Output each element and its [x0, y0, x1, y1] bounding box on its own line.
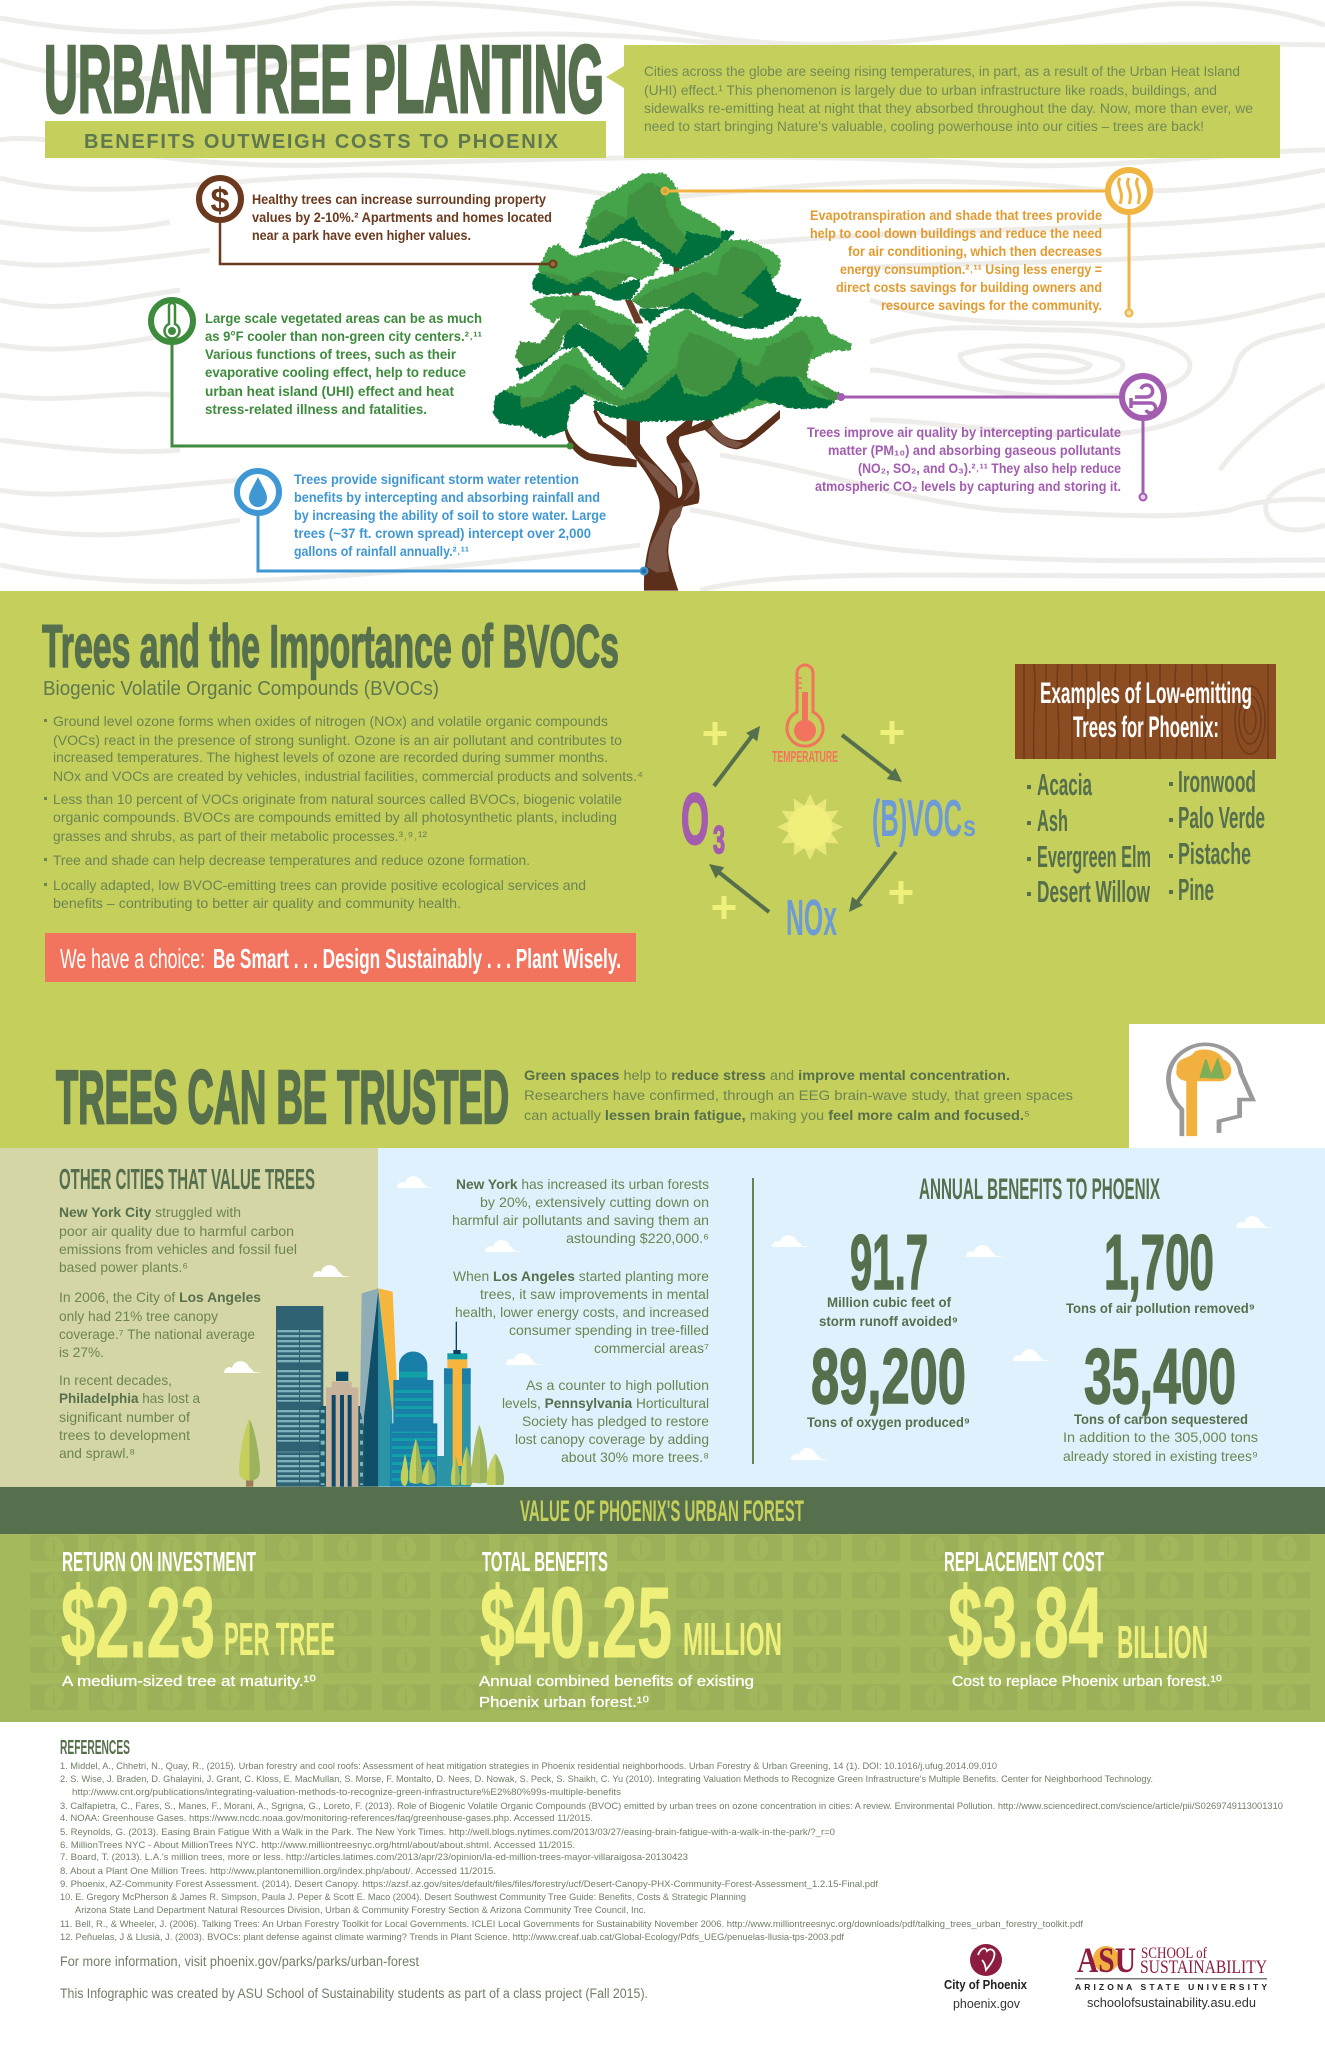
text block: BVOC bullets: Locally adapted, low BVOC-emitting trees can provide positive ecological services and: [53, 877, 586, 893]
stat: replacement cost: Cost to replace Phoenix urban forest.¹⁰: [952, 1673, 1222, 1690]
stat: storm runoff: Million cubic feet of: [827, 1294, 951, 1310]
text block: centre paragraphs: When Los Angeles started planting more: [453, 1268, 709, 1284]
text block: BVOC bullets: Ground level ozone forms when oxides of nitrogen (NOx) and volatile organic compounds: [53, 713, 608, 729]
text block: left paragraphs: trees to development: [59, 1427, 190, 1443]
text block: BVOC bullets: organic compounds. BVOCs are compounds emitted by all photosynthetic plants, including: [53, 809, 617, 825]
reference list: 2. S. Wise, J. Braden, D. Ghalayini, J. Grant, C. Kloss, E. MacMullan, S. Morse, F. Montalto, D. Nees, D. Nowak, S. Peck, S. Shaikh, C. Yu (2010). Integrating Valuation Methods to Recognize Green Infrastructure's Multiple Benefits. Center for Neighborhood Technology.: [60, 1774, 1153, 1785]
labels: (B)VOC: [872, 790, 962, 848]
text block: left paragraphs: In 2006, the City of Los Angeles: [59, 1289, 261, 1305]
subtitle banner: BENEFITS OUTWEIGH COSTS TO PHOENIX: [84, 131, 559, 153]
text block: BVOC bullets: grasses and shrubs, as part of their metabolic processes.³˒⁹˒¹²: [53, 828, 427, 844]
reference list: 8. About a Plant One Million Trees. http://www.plantonemillion.org/index.php/about/. Accessed 11/2015.: [60, 1866, 496, 1877]
reference list: 7. Board, T. (2013). L.A.'s million trees, more or less. http://articles.latimes.com/2013/apr/23/opinion/la-ed-million-trees-mayor-villaraigosa-20130423: [60, 1852, 688, 1863]
list: low-emitting trees: Ash: [1037, 803, 1068, 838]
text block: BVOC bullets: [44, 713, 643, 911]
reference list: http://www.cnt.org/publications/integrating-valuation-methods-to-recognize-green-infrastructure%E2%80%99s-multiple-benefits: [72, 1787, 621, 1798]
labels: O: [681, 780, 709, 860]
right tower: [437, 1322, 471, 1487]
intro panel: sidewalks re-emitting heat at night that they absorbed throughout the day. Now, more than ever, we: [644, 100, 1253, 116]
connector line: [665, 191, 1129, 313]
text: matter (PM₁₀) and absorbing gaseous pollutants: [828, 442, 1121, 458]
labels: [681, 780, 976, 946]
text: direct costs savings for building owners and: [836, 279, 1102, 295]
text: stress-related illness and fatalities.: [205, 401, 427, 417]
dome building: [390, 1352, 437, 1487]
reference list: Arizona State Land Department Natural Resources Division, Urban & Community Forestry Section & Arizona Community Tree Council, Inc.: [75, 1905, 646, 1916]
text: [810, 207, 1102, 313]
icon: thermometer: TEMPERATURE: [772, 749, 838, 766]
text block: BVOC bullets: (VOCs) react in the presence of strong sunlight. Ozone is an air pollutant and contributes to: [53, 732, 622, 748]
stat: return on investment: A medium-sized tree at maturity.¹⁰: [62, 1673, 316, 1690]
icon: heat waves: [1108, 170, 1150, 212]
callout: air quality: [807, 376, 1164, 500]
text: as 9°F cooler than non-green city centers.²˒¹¹: [205, 328, 482, 344]
logo: ASU School of Sustainability: SCHOOL of: [1141, 1945, 1208, 1962]
text: trees (~37 ft. crown spread) intercept over 2,000: [294, 525, 591, 541]
beige building: [326, 1372, 358, 1487]
text block: left paragraphs: coverage.⁷ The national average: [59, 1326, 255, 1342]
icon: wind: [1122, 376, 1164, 418]
stat: oxygen: [807, 1332, 970, 1430]
text: energy consumption.²˒¹¹ Using less energy =: [840, 261, 1102, 277]
references: [60, 1737, 1283, 2001]
logo: ASU School of Sustainability: SUSTAINABILITY: [1140, 1957, 1267, 1978]
callout: cooler areas: [151, 300, 574, 450]
heading: BVOCs: [42, 613, 619, 700]
text: urban heat island (UHI) effect and heat: [205, 383, 454, 399]
stat: air pollution: Tons of air pollution removed⁹: [1066, 1300, 1255, 1316]
icon: head with tree: [1129, 1024, 1325, 1149]
stat: return on investment: RETURN ON INVESTMENT: [62, 1546, 256, 1577]
intro panel: Cities across the globe are seeing rising temperatures, in part, as a result of the Urban Heat Island: [644, 63, 1240, 79]
list: low-emitting trees: Evergreen Elm: [1037, 839, 1151, 874]
clouds: [224, 1176, 1275, 1460]
reference list: 10. E. Gregory McPherson & James R. Simpson, Paula J. Peper & Scott E. Maco (2004). Desert Southwest Community Tree Guide: Benefits, Costs & Strategic Planning: [60, 1892, 746, 1903]
icon: dollar: [199, 178, 241, 220]
connector line: [841, 397, 1143, 497]
text: Various functions of trees, such as their: [205, 346, 457, 362]
stat: total benefits: $40.25: [480, 1567, 672, 1679]
text block: centre paragraphs: health, lower energy costs, and increased: [455, 1304, 709, 1320]
reference list: 5. Reynolds, G. (2013). Easing Brain Fatigue With a Walk in the Park. The New York Times. http://well.blogs.nytimes.com/2013/03/27/easing-brain-fatigue-with-a-walk-in-the-park/?_r=0: [60, 1827, 835, 1838]
icon: water drop: [237, 471, 279, 513]
labels: NOx: [786, 889, 837, 946]
text block: left paragraphs: Philadelphia has lost a: [59, 1390, 200, 1406]
connector line: [258, 516, 644, 571]
callout: storm water: [237, 471, 648, 574]
text: URBAN TREE PLANTING: [44, 26, 604, 133]
text block: centre paragraphs: As a counter to high pollution: [526, 1377, 709, 1393]
text block: centre paragraphs: commercial areas⁷: [594, 1340, 709, 1356]
side wings: [319, 1406, 364, 1487]
logo: ASU School of Sustainability: schoolofsustainability.asu.edu: [1087, 1995, 1256, 2010]
list: low-emitting trees: [1027, 764, 1265, 909]
text: Evapotranspiration and shade that trees provide: [810, 207, 1102, 223]
upper branch stubs: [572, 267, 680, 323]
text: Trees provide significant storm water retention: [294, 471, 579, 487]
text block: left paragraphs: significant number of: [59, 1409, 190, 1425]
text block: green spaces: Green spaces help to reduce stress and improve mental concentration.: [524, 1067, 1010, 1083]
callout: we have a choice: We have a choice:: [60, 943, 205, 974]
logo: ASU School of Sustainability: ASU: [1077, 1940, 1136, 1980]
icon: sun: [777, 794, 843, 860]
text: gallons of rainfall annually.²˒¹¹: [294, 543, 469, 559]
stat: return on investment: $2.23: [61, 1567, 215, 1679]
text block: left paragraphs: In recent decades,: [59, 1372, 172, 1388]
callout: property values: [199, 178, 556, 268]
text: resource savings for the community.: [881, 297, 1102, 313]
plus signs: [704, 721, 912, 919]
text block: left paragraphs: is 27%.: [59, 1344, 104, 1360]
list: low-emitting trees: Pine: [1178, 872, 1214, 907]
callout: cooling buildings: [662, 170, 1150, 316]
stat: carbon: 35,400: [1084, 1332, 1236, 1420]
text block: centre paragraphs: [452, 1176, 709, 1465]
text block: centre paragraphs: by 20%, extensively cutting down on: [480, 1194, 709, 1210]
logo: ASU School of Sustainability: ARIZONA STATE UNIVERSITY: [1075, 1982, 1267, 1992]
text block: left paragraphs: and sprawl.⁸: [59, 1445, 135, 1461]
panel: value band: VALUE OF PHOENIX'S URBAN FOREST: [520, 1495, 804, 1528]
text: (NO₂, SO₂, and O₃).²˒¹¹ They also help reduce: [858, 460, 1121, 476]
stat: carbon: [1063, 1332, 1258, 1464]
reference list: [60, 1761, 1283, 1943]
stat: storm runoff: storm runoff avoided⁹: [819, 1313, 958, 1329]
stat: total benefits: TOTAL BENEFITS: [482, 1546, 608, 1577]
tree illustration: [493, 173, 852, 591]
text: evaporative cooling effect, help to reduce: [205, 364, 466, 380]
connector line: [172, 345, 570, 446]
text block: left paragraphs: poor air quality due to harmful carbon: [59, 1223, 294, 1239]
text: TREES CAN BE TRUSTED: [56, 1055, 509, 1139]
text block: centre paragraphs: trees, it saw improvements in mental: [480, 1286, 709, 1302]
reference list: 9. Phoenix, AZ-Community Forest Assessment. (2014). Desert Canopy. https://azsf.az.gov/sites/default/files/files/forestry/ucf/Desert-Canopy-PHX-Community-Forest-Assessment_1.2.15-Final.pdf: [60, 1879, 878, 1890]
text block: centre paragraphs: astounding $220,000.⁶: [566, 1230, 709, 1246]
tree trunk and branches: [564, 408, 780, 591]
references heading: REFERENCES: [60, 1737, 130, 1759]
callout: we have a choice: Be Smart . . . Design Sustainably . . . Plant Wisely.: [213, 943, 621, 974]
stat: carbon: In addition to the 305,000 tons: [1063, 1429, 1258, 1445]
text block: BVOC bullets: benefits – contributing to better air quality and community health.: [53, 895, 461, 911]
stat: air pollution: 1,700: [1104, 1218, 1214, 1306]
stat: oxygen: Tons of oxygen produced⁹: [807, 1414, 970, 1430]
text block: centre paragraphs: Society has pledged to restore: [522, 1413, 709, 1429]
text: values by 2-10%.² Apartments and homes located: [252, 209, 552, 225]
text block: left paragraphs: New York City struggled with: [59, 1204, 241, 1220]
stat: storm runoff: [819, 1218, 958, 1329]
tower A: [276, 1306, 323, 1487]
labels: s: [963, 810, 976, 843]
heading: BVOCs: Biogenic Volatile Organic Compounds (BVOCs): [43, 678, 439, 700]
stat: replacement cost: REPLACEMENT COST: [944, 1546, 1104, 1577]
subtitle banner: [45, 121, 606, 158]
text: for air conditioning, which then decreases: [848, 243, 1102, 259]
stat: total benefits: Annual combined benefits of existing: [479, 1673, 754, 1690]
panel: value of urban forest: PER TREE: [224, 1613, 335, 1665]
stat: total benefits: Phoenix urban forest.¹⁰: [479, 1694, 649, 1711]
text: [807, 424, 1121, 494]
panel: BVOC section background: [0, 591, 1325, 1148]
text: Healthy trees can increase surrounding property: [252, 191, 546, 207]
panel: annual benefits: [807, 1173, 1258, 1464]
intro panel: need to start bringing Nature's valuable, cooling powerhouse into our cities – trees are back!: [644, 118, 1204, 134]
text block: centre paragraphs: about 30% more trees.⁸: [561, 1449, 709, 1465]
text block: left paragraphs: based power plants.⁶: [59, 1259, 188, 1275]
panel: value band: [0, 1487, 1325, 1534]
text block: BVOC bullets: Less than 10 percent of VOCs originate from natural sources called BVOCs, biogenic volatile: [53, 791, 622, 807]
credit: This Infographic was created by ASU School of Sustainability students as part of a class project (Fall 2015).: [60, 1986, 648, 2001]
arrows: [709, 726, 902, 912]
icon: dollar: $: [211, 182, 230, 220]
panel: value of urban forest: [0, 1534, 1325, 1722]
heading: BVOCs: Trees and the Importance of BVOCs: [42, 613, 619, 680]
text: atmospheric CO₂ levels by capturing and storing it.: [815, 478, 1121, 494]
text: by increasing the ability of soil to store water. Large: [294, 507, 606, 523]
list: low-emitting trees: Acacia: [1037, 767, 1092, 802]
stat: air pollution: [1066, 1218, 1255, 1316]
more information: For more information, visit phoenix.gov/parks/parks/urban-forest: [60, 1954, 419, 1969]
text block: green spaces: Researchers have confirmed, through an EEG brain-wave study, that green spaces: [524, 1087, 1073, 1103]
stat: storm runoff: 91.7: [850, 1218, 928, 1306]
stat: oxygen: 89,200: [811, 1332, 966, 1420]
text: [294, 471, 606, 559]
reference list: 11. Bell, R., & Wheeler, J. (2006). Talking Trees: An Urban Forestry Toolkit for Local Governments. ICLEI Local Governments for Sustainability November 2006. http://www.milliontreesnyc.org/downloads/pdf/talking_trees_urban_forestry_toolkit.pdf: [60, 1919, 1083, 1930]
wood grain background: [0, 3, 1325, 590]
stat: replacement cost: $3.84: [948, 1567, 1103, 1679]
labels: 3: [713, 819, 725, 862]
text: [205, 310, 482, 417]
reference list: 1. Middel, A., Chhetri, N., Quay, R., (2015). Urban forestry and cool roofs: Assessment of heat mitigation strategies in Phoenix residential neighborhoods. Urban Forestry & Urban Greening, 14 (1). DOI: 10.1016/j.ufug.2014.09.010: [60, 1761, 997, 1772]
list: low-emitting trees: Pistache: [1178, 836, 1251, 871]
logo: ASU School of Sustainability: [1075, 1940, 1267, 2010]
heading: other cities: OTHER CITIES THAT VALUE TREES: [59, 1164, 315, 1196]
intro panel: (UHI) effect.¹ This phenomenon is largely due to urban infrastructure like roads, buildings, and: [644, 82, 1217, 98]
text block: BVOC bullets: Tree and shade can help decrease temperatures and reduce ozone formation.: [53, 852, 530, 868]
text: near a park have even higher values.: [252, 227, 471, 243]
stat: total benefits: [479, 1546, 782, 1711]
stat: replacement cost: BILLION: [1117, 1616, 1208, 1668]
illustration: city skyline: [239, 1288, 504, 1487]
text: Large scale vegetated areas can be as much: [205, 310, 482, 326]
text block: green spaces: can actually lessen brain fatigue, making you feel more calm and focused. ⁵: [524, 1107, 1030, 1123]
tree canopy: [493, 173, 852, 438]
list: low-emitting trees: Desert Willow: [1037, 874, 1150, 909]
diagram: ozone cycle: [681, 665, 976, 946]
text block: BVOC bullets: NOx and VOCs are created by vehicles, industrial facilities, commercial products and solvents.⁴: [53, 768, 643, 784]
text: benefits by intercepting and absorbing rainfall and: [294, 489, 600, 505]
reference list: 4. NOAA: Greenhouse Gases. https://www.ncdc.noaa.gov/monitoring-references/faq/greenhouse-gases.php. Accessed 11/2015.: [60, 1813, 593, 1824]
text block: left paragraphs: [59, 1204, 297, 1461]
reference list: 6. MillionTrees NYC - About MillionTrees NYC. http://www.milliontreesnyc.org/html/about/about.shtml. Accessed 11/2015.: [60, 1840, 575, 1851]
callout: we have a choice: [45, 933, 636, 982]
reference list: 12. Peñuelas, J & Llusià, J. (2003). BVOCs: plant defense against climate warming? Trends in Plant Science. http://www.creaf.uab.cat/Global-Ecology/Pdfs_UEG/penuelas-llusia-tps-2003.pdf: [60, 1932, 844, 1943]
text block: left paragraphs: emissions from vehicles and fossil fuel: [59, 1241, 297, 1257]
text: [252, 191, 552, 243]
stat: carbon: Tons of carbon sequestered: [1074, 1411, 1248, 1427]
text: help to cool down buildings and reduce the need: [810, 225, 1102, 241]
panel: other cities: [0, 1148, 1325, 1487]
list: low-emitting trees: Ironwood: [1178, 764, 1256, 799]
text block: green spaces: [524, 1067, 1073, 1123]
text block: centre paragraphs: levels, Pennsylvania Horticultural: [502, 1395, 709, 1411]
intro panel: [606, 45, 1280, 158]
icon: thermometer: [772, 665, 838, 766]
text: Trees improve air quality by intercepting particulate: [807, 424, 1121, 440]
divider: [752, 1178, 754, 1464]
icon: thermometer: [151, 300, 193, 342]
trees: [239, 1419, 504, 1487]
stat: total benefits: MILLION: [683, 1613, 782, 1665]
connector line: [220, 223, 553, 264]
spire tower: [360, 1288, 397, 1487]
logo: City of Phoenix: [944, 1944, 1028, 2011]
logo: City of Phoenix: phoenix.gov: [953, 1996, 1020, 2011]
text block: centre paragraphs: lost canopy coverage by adding: [515, 1431, 709, 1447]
stat: carbon: already stored in existing trees⁹: [1063, 1448, 1258, 1464]
reference list: 3. Calfapietra, C., Fares, S., Manes, F., Morani, A., Sgrigna, G., Loreto, F. (2013). Role of Biogenic Volatile Organic Compounds (BVOC) emitted by urban trees on ozone concentration in cities: A review. Environmental Pollution. http://www.sciencedirect.com/science/article/pii/S0269749113001310: [60, 1801, 1283, 1812]
text block: centre paragraphs: consumer spending in tree-filled: [509, 1322, 709, 1338]
text block: centre paragraphs: New York has increased its urban forests: [456, 1176, 709, 1192]
panel: low-emitting trees header: [1015, 664, 1276, 759]
wood texture: [1024, 664, 1268, 759]
text block: BVOC bullets: increased temperatures. The highest levels of ozone are recorded during summer months.: [53, 749, 608, 765]
text block: left paragraphs: only had 21% tree canopy: [59, 1308, 218, 1324]
text block: centre paragraphs: harmful air pollutants and saving them an: [452, 1212, 709, 1228]
logo: City of Phoenix: City of Phoenix: [944, 1977, 1028, 1992]
